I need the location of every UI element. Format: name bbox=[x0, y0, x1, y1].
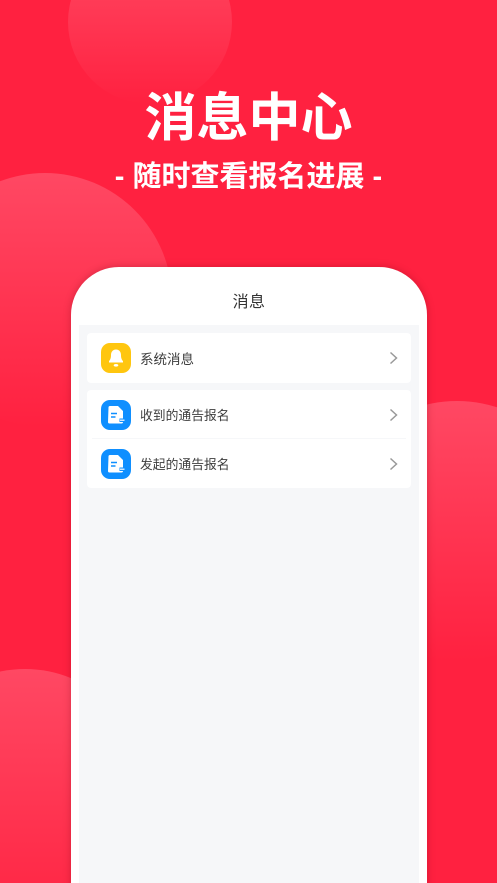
message list background bbox=[79, 325, 419, 883]
icon: yellow bell bbox=[101, 343, 131, 373]
background circle: bottom left bbox=[0, 669, 145, 883]
chevron: sent signups bbox=[390, 458, 398, 470]
phone mockup bbox=[71, 267, 427, 883]
subtitle: - 随时查看报名进展 - bbox=[115, 161, 382, 193]
card: signup messages bbox=[87, 390, 411, 488]
card: system messages bbox=[87, 333, 411, 383]
icon: received document bbox=[101, 400, 131, 430]
title: 消息中心 bbox=[144, 90, 352, 148]
icon: sent document bbox=[101, 449, 131, 479]
label: system messages: 系统消息 bbox=[140, 352, 194, 367]
background circle: left bbox=[0, 173, 172, 427]
chevron: system messages bbox=[390, 352, 398, 364]
label: sent signups: 发起的通告报名 bbox=[140, 457, 230, 472]
label: received signups: 收到的通告报名 bbox=[140, 408, 230, 423]
phone header title: 消息 bbox=[233, 294, 265, 311]
chevron: received signups bbox=[390, 409, 398, 421]
row divider bbox=[92, 438, 406, 439]
background circle: right bbox=[327, 401, 497, 661]
background circle: top bbox=[68, 0, 232, 104]
